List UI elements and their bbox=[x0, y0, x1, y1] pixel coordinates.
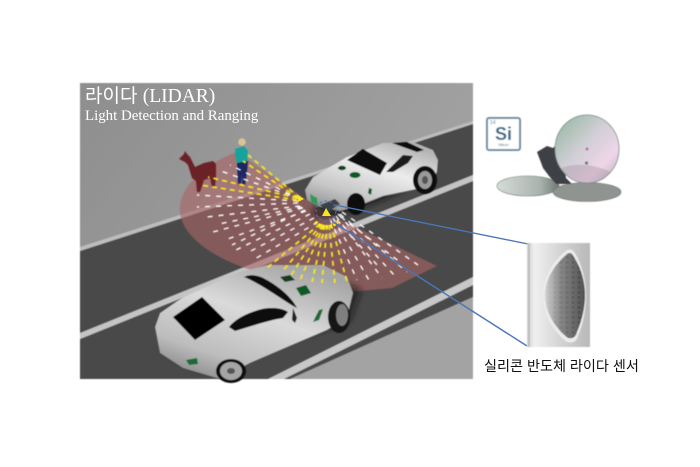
icon: deer bbox=[179, 151, 216, 192]
caption: 실리콘 반도체 라이다 센서 bbox=[484, 358, 639, 374]
leader lines bbox=[333, 205, 528, 346]
panel: road scene bbox=[80, 83, 473, 383]
title: 라이다 (LIDAR) bbox=[85, 85, 215, 107]
flat wafer right bbox=[553, 182, 621, 202]
icon: silicon element tile: Si bbox=[495, 124, 512, 144]
panel: silicon lidar sensor close-up bbox=[527, 243, 590, 347]
icon: pedestrian bbox=[235, 138, 248, 186]
white lidar rays bbox=[197, 165, 418, 282]
upper car bbox=[305, 142, 438, 227]
silicon rock bbox=[537, 145, 572, 184]
yellow lidar rays bbox=[200, 155, 348, 285]
lidar detection fan bbox=[180, 152, 437, 292]
flat wafer left bbox=[497, 176, 559, 196]
icon: silicon element tile: Silicon bbox=[498, 143, 509, 147]
panel: silicon wafers bbox=[487, 115, 621, 202]
icon: silicon element tile bbox=[487, 118, 520, 150]
icon: silicon element tile: 14 bbox=[490, 120, 496, 126]
title: Light Detection and Ranging bbox=[85, 108, 259, 124]
title bbox=[85, 85, 259, 124]
standing wafer bbox=[555, 115, 619, 183]
lower car bbox=[155, 265, 362, 383]
sensor emitter bbox=[298, 195, 338, 227]
road background bbox=[80, 83, 473, 379]
